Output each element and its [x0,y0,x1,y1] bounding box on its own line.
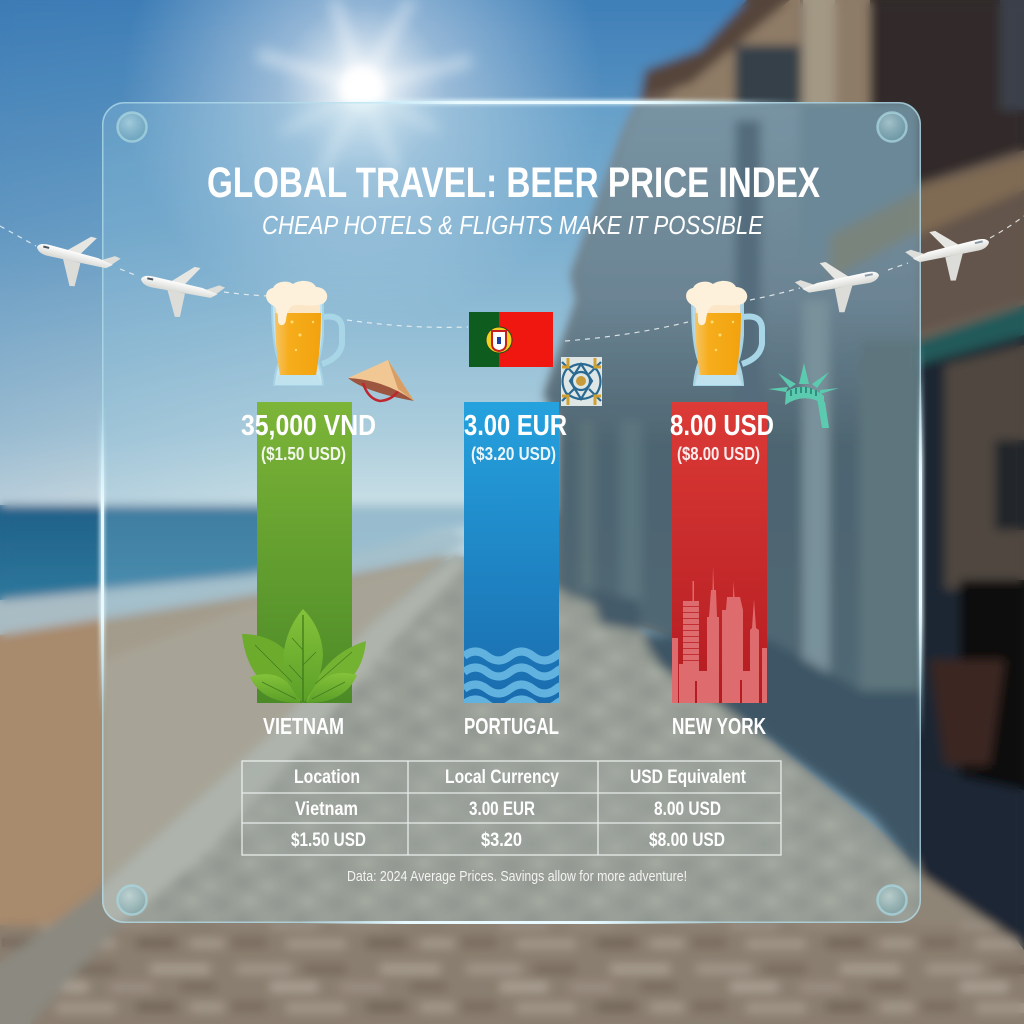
glass panel [85,100,923,925]
table row 1: 3.00 EUR [469,799,535,820]
table header: Location [294,767,360,788]
panel: curb tone [85,555,468,925]
table row 2: $8.00 USD [649,830,725,851]
table row 2 [291,830,725,851]
panel: New York bar [670,402,774,739]
panel: Portugal bar [464,402,566,734]
facade upper tan [640,0,800,240]
street shadow [880,760,1024,945]
table header: USD Equivalent [630,767,747,788]
table row 2: $3.20 [481,830,522,851]
panel: beach tone [106,571,420,872]
panel: street shadow [640,635,921,875]
window dark [735,45,800,545]
bar: blue [464,402,559,703]
sea [0,505,520,610]
icon: beer mug New York [686,281,762,385]
eaves [640,0,790,98]
panel: facade tone [545,100,921,700]
icon: Statue of Liberty crown [768,363,839,428]
icon: conical hat [348,360,414,401]
bar: red [672,402,767,703]
table row 1 [295,799,721,820]
bar: green [257,402,352,703]
table row 1: Vietnam [295,799,358,820]
building facade [545,0,1024,950]
brick street [30,560,1024,1024]
sand beach [0,555,450,963]
panel: awning tone [830,190,921,280]
surf foam [0,530,470,642]
label: New York: NEW YORK [672,713,766,739]
panel: facade pillars [580,120,921,690]
price: Portugal: 3.00 EUR [464,410,567,442]
usd: New York: ($8.00 USD) [677,444,760,464]
pavement curb [0,555,468,1024]
sun [100,0,610,330]
panel edge glows [100,100,923,924]
panel: cobble tone [120,562,921,923]
icon: airplane 4 [902,220,996,290]
teal awning strip [890,305,1024,375]
table header [294,767,747,788]
icon: waves [464,647,559,703]
footer note: Data: 2024 Average Prices. Savings allow for more adventure! [347,869,687,885]
icon: airplane 2 [135,257,228,326]
panel: facade top-right light [801,104,918,188]
icon: Portugal flag [469,312,553,367]
icon: airplane 1 [30,225,124,296]
balcony dark [870,0,1024,200]
table header: Local Currency [445,767,559,788]
awning [860,158,1024,260]
flower pot [930,660,1005,765]
icon: green leaves [242,609,366,703]
icon: beer mug Vietnam [266,281,342,385]
icon: skyline [672,566,767,703]
pillar tan [803,0,835,700]
usd: Portugal: ($3.20 USD) [471,444,556,464]
wall and doorway [880,335,1024,950]
sea haze [340,505,520,570]
label: Portugal: PORTUGAL [464,713,559,739]
price table [242,761,781,855]
table row 2: $1.50 USD [291,830,366,851]
subtitle: CHEAP HOTELS & FLIGHTS MAKE IT POSSIBLE [262,210,764,240]
panel: Vietnam bar [241,402,376,739]
price: New York: 8.00 USD [670,410,774,442]
icon: azulejo tile [561,357,602,406]
flight path dashed line [0,216,1024,341]
icon: airplane 3 [792,252,885,320]
corner screws [118,112,906,914]
table row 1: 8.00 USD [654,799,721,820]
price: Vietnam: 35,000 VND [241,410,376,442]
label: Vietnam: VIETNAM [263,713,344,739]
usd: Vietnam: ($1.50 USD) [261,444,346,464]
title: GLOBAL TRAVEL: BEER PRICE INDEX [207,159,820,207]
